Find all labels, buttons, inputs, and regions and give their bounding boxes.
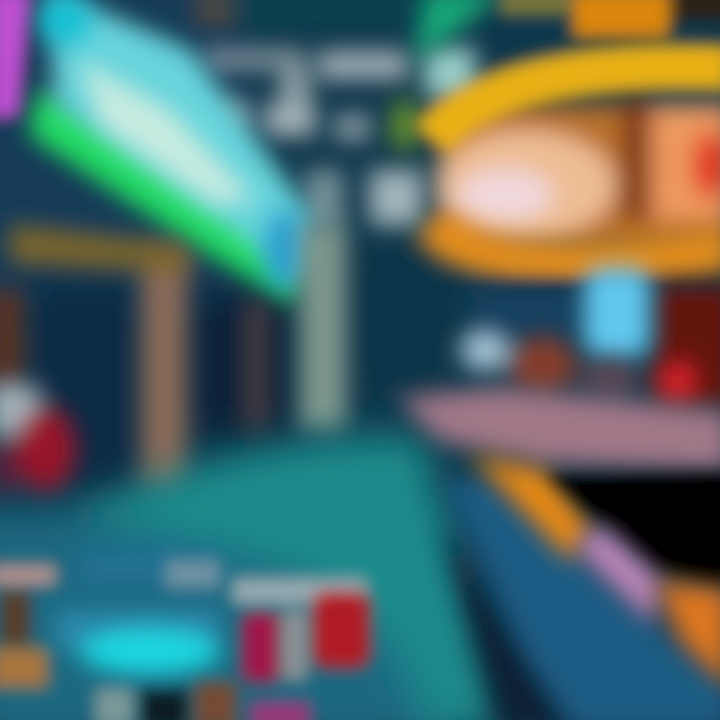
yellow curved awning <box>432 67 720 140</box>
orange lower awning <box>432 222 720 263</box>
top centre dark teal canopy <box>195 0 420 30</box>
cyan glowing panel <box>584 268 650 358</box>
brown left pillar <box>142 250 267 490</box>
green accent top centre <box>391 0 505 151</box>
golden horizontal beam left <box>10 225 190 272</box>
pink patch <box>575 525 660 625</box>
orange diagonal strip <box>470 455 592 560</box>
black wedge <box>545 470 720 590</box>
counter items: lights and brown objects <box>461 330 698 401</box>
orange and dark block top right <box>500 0 720 38</box>
orange corner right <box>655 580 720 690</box>
cyan glow bottom left <box>55 550 220 674</box>
grey and white signage blocks <box>205 48 475 230</box>
beige stacked object bottom left <box>0 565 56 688</box>
blue diagonal lower right <box>440 480 720 720</box>
teal curved floor <box>70 437 500 720</box>
figure at left edge <box>0 290 75 490</box>
background: dark blue and teal tones <box>0 0 455 720</box>
grey teal central pillar <box>300 225 346 430</box>
restaurant facade peach and red <box>435 100 720 245</box>
red and crimson objects bottom centre <box>95 560 370 720</box>
magenta strip top left <box>0 0 30 120</box>
green and cyan diagonal banner <box>30 0 310 305</box>
dark red wall right <box>470 285 720 405</box>
pink mauve counter diagonal <box>398 388 720 470</box>
